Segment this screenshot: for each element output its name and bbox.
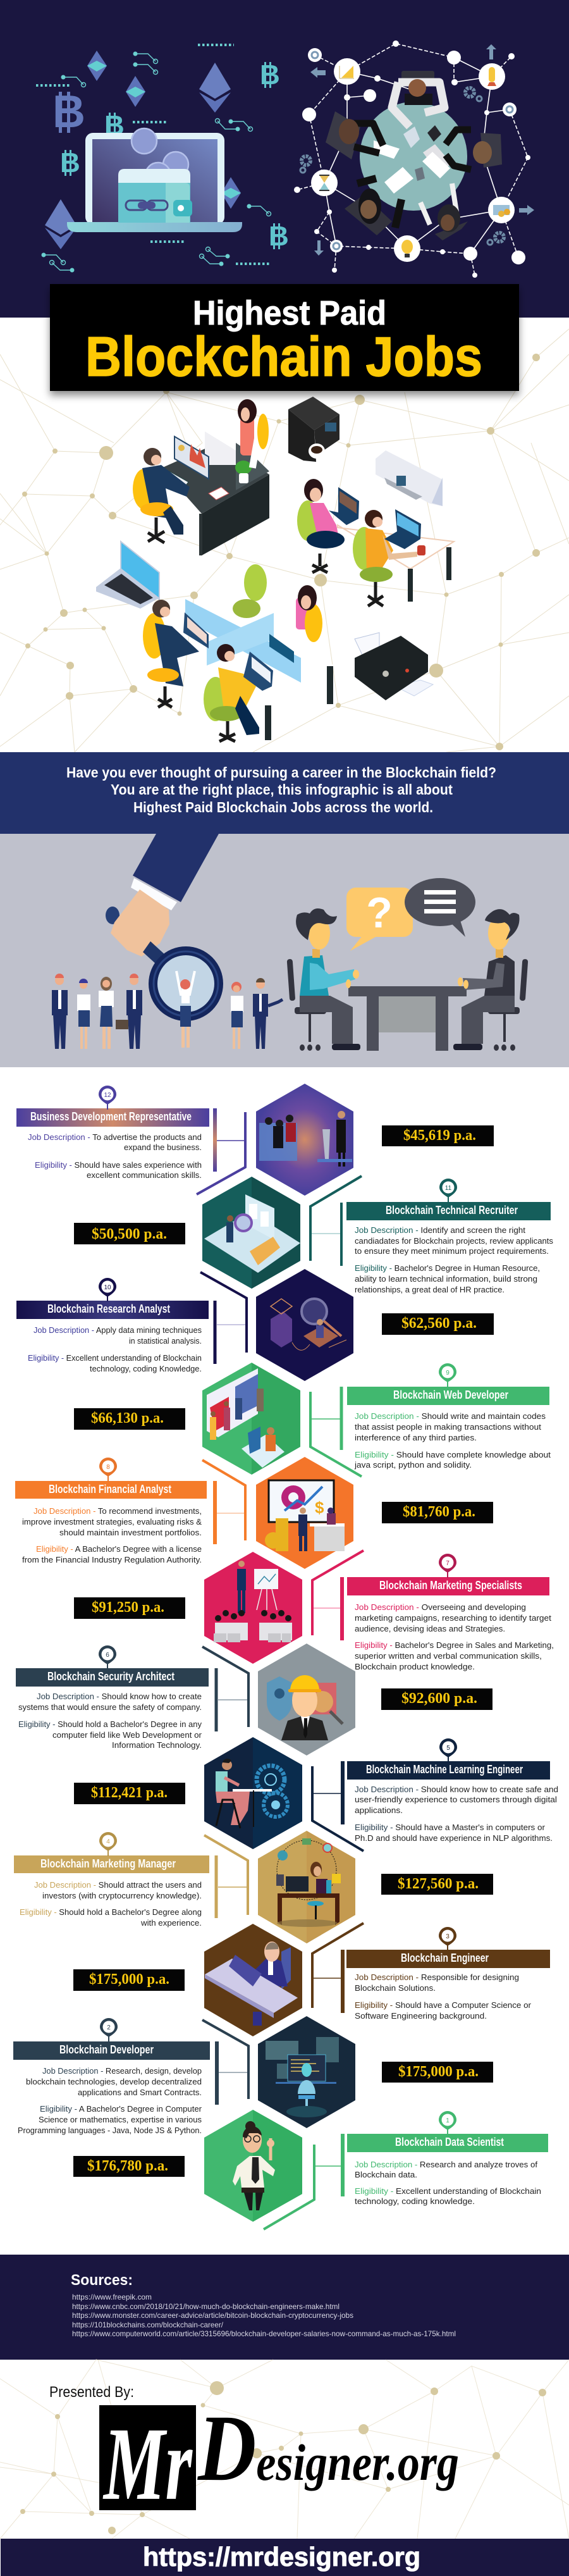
hexagon image: finance growth [256, 1457, 353, 1569]
node icons [312, 52, 513, 257]
connector [202, 1460, 245, 1544]
job 2: Blockchain Developer [13, 2016, 493, 2135]
title banner [50, 284, 519, 391]
heading: Blockchain Engineer [401, 1952, 489, 1964]
heading: Blockchain Developer [59, 2043, 154, 2056]
salary [74, 1783, 185, 1804]
description: computer field like Web Development or [52, 1730, 202, 1740]
number pin: 11 [445, 1185, 452, 1192]
hexagon image: finance growth: $ [315, 1498, 324, 1517]
heading bar [16, 1301, 209, 1319]
heading: Blockchain Marketing Specialists [379, 1579, 522, 1592]
description: Programming languages - Java, Node JS & Python. [18, 2126, 202, 2135]
description [22, 1506, 202, 1564]
gears [300, 88, 504, 245]
salary [382, 1125, 494, 1146]
sources list: https://www.monster.com/career-advice/article/bitcoin-blockchain-cryptocurrency-jobs [72, 2311, 353, 2320]
heading bar [15, 1481, 207, 1499]
heading: Blockchain Web Developer [393, 1389, 508, 1401]
description: Job Description - To advertise the products and [28, 1132, 202, 1142]
job 8: Blockchain Financial Analyst [15, 1457, 493, 1569]
hexagon image: web development team [202, 1363, 300, 1475]
description [18, 1692, 202, 1750]
connector [197, 1108, 245, 1194]
job 10: Blockchain Research Analyst [16, 1269, 494, 1381]
number pin: 9 [446, 1370, 450, 1377]
icon: bitcoin symbols [52, 59, 289, 252]
number pin: 7 [446, 1560, 450, 1567]
seated people [326, 71, 502, 240]
description: Eligibility - Excellent understanding of Blockchain [28, 1353, 202, 1363]
description: technology, coding knowledge. [355, 2196, 475, 2206]
description: relationships, a great deal of HR practice. [355, 1285, 505, 1294]
speech bubble: message [405, 878, 475, 937]
desk with man and woman [133, 399, 269, 555]
description: from the Financial Industry Regulation Authority. [22, 1555, 202, 1564]
title: Blockchain Jobs: Blockchain Jobs [85, 325, 482, 388]
description: audience, devising ideas and Strategies. [355, 1624, 505, 1633]
hexagon image: engineer at laptop [204, 1924, 302, 2036]
connector [202, 1647, 248, 1731]
logo text: Mr: Mr [102, 2406, 193, 2522]
number pin [439, 1554, 456, 1578]
description: Blockchain Solutions. [355, 1983, 436, 1993]
description: Job Description - Identify and screen the right [355, 1225, 525, 1235]
icon: bitcoin symbols: B [52, 87, 85, 137]
description: Ph.D and should have experience in NLP algorithms. [355, 1833, 553, 1843]
number pin [439, 1927, 456, 1950]
connector [202, 2020, 248, 2105]
description: Eligibility - Should hold a Bachelor's Degree in any [18, 1719, 202, 1729]
description: Job Description - Should write and maintain codes [355, 1411, 546, 1421]
illustration: hand with magnifier selecting candidate [52, 834, 283, 1049]
title: Highest Paid: Highest Paid [193, 294, 386, 332]
connector [200, 1272, 247, 1364]
salary: $112,421 p.a. [91, 1785, 168, 1801]
intro text [66, 764, 496, 815]
description: Eligibility - Bachelor's Degree in Sales and Marketing, [355, 1640, 554, 1650]
description [355, 1225, 553, 1294]
number pin: 12 [104, 1092, 111, 1099]
number pin [99, 1458, 117, 1482]
illustration: isometric office [96, 397, 454, 741]
heading: Blockchain Research Analyst [47, 1303, 170, 1315]
salary: $45,619 p.a. [403, 1127, 476, 1144]
wallet with chain [118, 169, 192, 223]
description: expand the business. [124, 1142, 202, 1152]
description: Job Description - Research, design, develop [42, 2066, 202, 2076]
number pin [99, 1832, 117, 1856]
description [354, 1411, 551, 1470]
hexagon image: marketing presentation [204, 1552, 302, 1664]
salary [74, 1597, 185, 1619]
intro text: Have you ever thought of pursuing a career in the Blockchain field? [66, 764, 496, 781]
network connection lines [297, 44, 528, 275]
description [355, 2160, 541, 2206]
description: investors (with cryptocurrency knowledge). [42, 1891, 202, 1900]
description: interference of any third parties. [355, 1433, 477, 1442]
speech bubble: question [346, 888, 413, 951]
network background: lower nodes [20, 2381, 546, 2534]
description [355, 1602, 554, 1671]
salary [73, 2156, 185, 2177]
icon: bitcoin symbols: B [60, 147, 80, 178]
description: superior written and verbal communication skills, [355, 1651, 542, 1661]
two staff at white desk [297, 479, 454, 606]
description [355, 1972, 532, 2021]
description: user-friendly experience to customers through digital [355, 1795, 557, 1804]
job 9: Blockchain Web Developer [74, 1363, 551, 1477]
interviewee [287, 908, 360, 1051]
salary: $175,000 p.a. [89, 1971, 169, 1988]
heading bar [13, 2041, 210, 2060]
intro text: You are at the right place, this infographic is all about [111, 781, 453, 798]
number pin: 10 [104, 1284, 111, 1291]
heading: Blockchain Financial Analyst [49, 1483, 171, 1495]
description: Job Description - Overseeing and developing [355, 1602, 526, 1612]
candidates row [52, 974, 283, 1049]
heading bar [16, 1108, 209, 1127]
salary: $62,560 p.a. [401, 1315, 477, 1332]
heading bar [347, 1577, 549, 1595]
interviewer [453, 909, 528, 1051]
speech bubble: question: ? [366, 889, 393, 937]
number pin [439, 1363, 456, 1387]
description: Blockchain product knowledge. [355, 1662, 475, 1671]
description: Eligibility - A Bachelor's Degree in Computer [40, 2104, 202, 2114]
job 6: Blockchain Security Architect [16, 1644, 493, 1756]
description: Eligibility - Should have complete knowledge about [355, 1450, 551, 1459]
heading: Blockchain Security Architect [47, 1670, 174, 1683]
heading: Business Development Representative [30, 1110, 192, 1123]
sources list [72, 2293, 456, 2338]
salary [74, 1408, 185, 1430]
standalone laptop [96, 542, 159, 609]
sources panel [0, 2255, 569, 2360]
description: Job Description - To recommend investments, [34, 1506, 202, 1516]
salary: $176,780 p.a. [87, 2158, 168, 2174]
arrows [310, 44, 534, 256]
description: Job Description - Should know how to create [37, 1692, 202, 1701]
illustration: team meeting around table with network [294, 40, 534, 278]
heading bar [346, 1950, 550, 1968]
salary [381, 1688, 493, 1710]
icon: bitcoin symbols: B [260, 59, 280, 90]
number pin: 8 [106, 1464, 110, 1471]
cubicle desk with three staff [143, 564, 335, 741]
logo: MrDesigner.org [99, 2396, 459, 2522]
sources list: https://www.computerworld.com/article/3315696/blockchain-developer-salaries-now-command-as-much-as-175k.html [72, 2329, 456, 2338]
coffee machine [288, 397, 340, 462]
sources list: https://www.cnbc.com/2018/10/21/how-much-do-blockchain-engineers-make.html [72, 2302, 340, 2311]
number pin [100, 2018, 118, 2042]
heading bar [347, 1387, 549, 1405]
heading bar [16, 1668, 209, 1687]
salary: $127,560 p.a. [398, 1876, 479, 1892]
number pin: 5 [446, 1745, 450, 1752]
description: Job Description - Research and analyze troves of [355, 2160, 537, 2169]
description: Science or mathematics, expertise in various [39, 2115, 202, 2124]
interview table [348, 986, 467, 1051]
description: applications. [355, 1805, 403, 1815]
logo text: Designer.org: Designer.org [197, 2396, 459, 2501]
connector [204, 1835, 248, 1918]
description: Eligibility - Should have sales experience with [35, 1160, 202, 1170]
footer url band [1, 2539, 569, 2576]
number pin: 4 [106, 1838, 110, 1845]
description: systems that would ensure the safety of company. [18, 1702, 202, 1712]
coins [132, 128, 188, 188]
url: https://mrdesigner.org [143, 2542, 420, 2572]
salary [382, 1502, 493, 1523]
number pin [439, 1738, 457, 1762]
description: Eligibility - A Bachelor's Degree with a license [36, 1544, 202, 1554]
description: should maintain investment portfolios. [59, 1528, 202, 1537]
description: Eligibility - Excellent understanding of Blockchain [355, 2186, 541, 2196]
connector [312, 1551, 364, 1640]
job 4: Blockchain Marketing Manager [14, 1831, 493, 1943]
intro text: Highest Paid Blockchain Jobs across the world. [133, 799, 433, 815]
salary: $66,130 p.a. [91, 1410, 164, 1427]
illustration: crypto wallet on laptop [36, 45, 289, 272]
salary [381, 1874, 493, 1895]
description: excellent communication skills. [87, 1170, 202, 1180]
description [355, 1785, 558, 1843]
sources list: https://www.freepik.com [72, 2293, 152, 2301]
dotted lines and circuit traces [36, 45, 271, 272]
sources heading: Sources: [71, 2272, 133, 2289]
intro band [0, 752, 569, 834]
connector [312, 1923, 364, 2013]
salary: $91,250 p.a. [92, 1599, 164, 1616]
heading bar [347, 1761, 550, 1780]
connector [310, 1387, 362, 1477]
salary [73, 1969, 185, 1991]
network background: lower [0, 2360, 569, 2539]
hexagon image: data mining [256, 1269, 353, 1381]
arm and hand [106, 834, 219, 957]
hexagon image: data scientist [204, 2110, 302, 2222]
number pin: 2 [107, 2024, 111, 2031]
magnifier [143, 941, 223, 1048]
description: Eligibility - Should hold a Bachelor's Degree along [20, 1907, 202, 1917]
heading: Blockchain Marketing Manager [40, 1857, 176, 1870]
air conditioner [376, 450, 443, 506]
number pin: 1 [446, 2117, 450, 2124]
description: candiadates for Blockchain projects, review applicants [355, 1236, 553, 1246]
presented by: Presented By: [49, 2384, 134, 2401]
description: ability to learn technical information, build strong [355, 1274, 537, 1284]
job 3: Blockchain Engineer [73, 1923, 550, 2036]
hexagon image: recruiter reviewing resumes [202, 1177, 300, 1289]
description [28, 1132, 202, 1180]
meeting table [360, 102, 467, 211]
hexagon image: developer with holographic screens [258, 2016, 355, 2128]
description: Software Engineering background. [355, 2011, 487, 2021]
hexagon image: woman at desk [258, 1831, 355, 1943]
printer [355, 633, 433, 700]
description: with experience. [140, 1918, 202, 1928]
description: marketing campaigns, researching to identify target [355, 1613, 551, 1623]
salary [74, 1223, 185, 1244]
network nodes [294, 40, 530, 278]
description: technology, coding Knowledge. [90, 1364, 202, 1373]
description: java script, python and solidity. [354, 1460, 472, 1470]
description: improve investment strategies, evaluating risks & [22, 1517, 202, 1526]
number pin: 6 [106, 1652, 109, 1659]
description: Information Technology. [112, 1740, 202, 1750]
network background: upper [0, 329, 569, 752]
job 1: Blockchain Data Scientist [73, 2110, 548, 2229]
heading: Blockchain Data Scientist [395, 2136, 504, 2148]
recruitment panel background [0, 834, 569, 1067]
job 5: Blockchain Machine Learning Engineer [74, 1737, 558, 1851]
icon: ethereum diamonds [45, 51, 241, 249]
heading: Blockchain Technical Recruiter [386, 1204, 518, 1217]
connector [264, 2134, 343, 2229]
description: in statistical analysis. [129, 1336, 202, 1346]
description: blockchain technologies, develop decentralized [26, 2077, 202, 2086]
salary: $175,000 p.a. [398, 2064, 479, 2080]
connector [312, 1761, 364, 1851]
description: Blockchain data. [355, 2170, 417, 2179]
number pin [99, 1278, 116, 1301]
salary: $81,760 p.a. [403, 1504, 475, 1520]
description: Job Description - Should attract the users and [34, 1880, 202, 1890]
connector [310, 1176, 362, 1266]
job 7: Blockchain Marketing Specialists [74, 1551, 554, 1671]
description: applications and Smart Contracts. [78, 2088, 202, 2097]
icon: bitcoin symbols: B [104, 110, 125, 141]
salary: $92,600 p.a. [401, 1690, 477, 1707]
heading bar [346, 1202, 551, 1220]
description: Job Description - Apply data mining techniques [34, 1325, 202, 1335]
heading bar [347, 2134, 548, 2152]
heading bar [14, 1855, 209, 1873]
job 11: Blockchain Technical Recruiter [74, 1176, 553, 1294]
illustration: job interview [287, 878, 528, 1051]
sources list: https://101blockchains.com/blockchain-career/ [72, 2320, 224, 2329]
hexagon image: machine learning [204, 1737, 302, 1849]
description [28, 1325, 202, 1373]
description [20, 1880, 202, 1928]
number pin [99, 1086, 116, 1110]
salary [382, 2062, 493, 2083]
icon: bitcoin symbols: B [269, 221, 289, 252]
job 12: Business Development Representative [16, 1084, 494, 1196]
number pin [99, 1645, 116, 1669]
description: Eligibility - Should have a Master's in computers or [355, 1823, 546, 1832]
number pin [439, 1179, 457, 1203]
description: Job Description - Responsible for designing [355, 1972, 519, 1982]
number pin: 3 [446, 1933, 450, 1940]
description: Eligibility - Bachelor's Degree in Human Resource, [355, 1263, 540, 1273]
description [18, 2066, 202, 2135]
laptop [67, 133, 242, 232]
description: to ensure they meet minimum project requirements. [355, 1246, 549, 1256]
description: Job Description - Should know how to create safe and [355, 1785, 558, 1794]
top banner background [0, 0, 569, 318]
network background: nodes [22, 354, 540, 750]
description: Eligibility - Should have a Computer Science or [355, 2000, 532, 2010]
hexagon image: security architect [258, 1644, 355, 1756]
salary: $50,500 p.a. [92, 1226, 167, 1242]
salary [382, 1313, 494, 1335]
description: that assist people in making transactions without [355, 1422, 541, 1432]
papers and devices [374, 125, 451, 194]
number pin [439, 2111, 456, 2134]
hexagon image: speaker and audience [256, 1084, 353, 1196]
